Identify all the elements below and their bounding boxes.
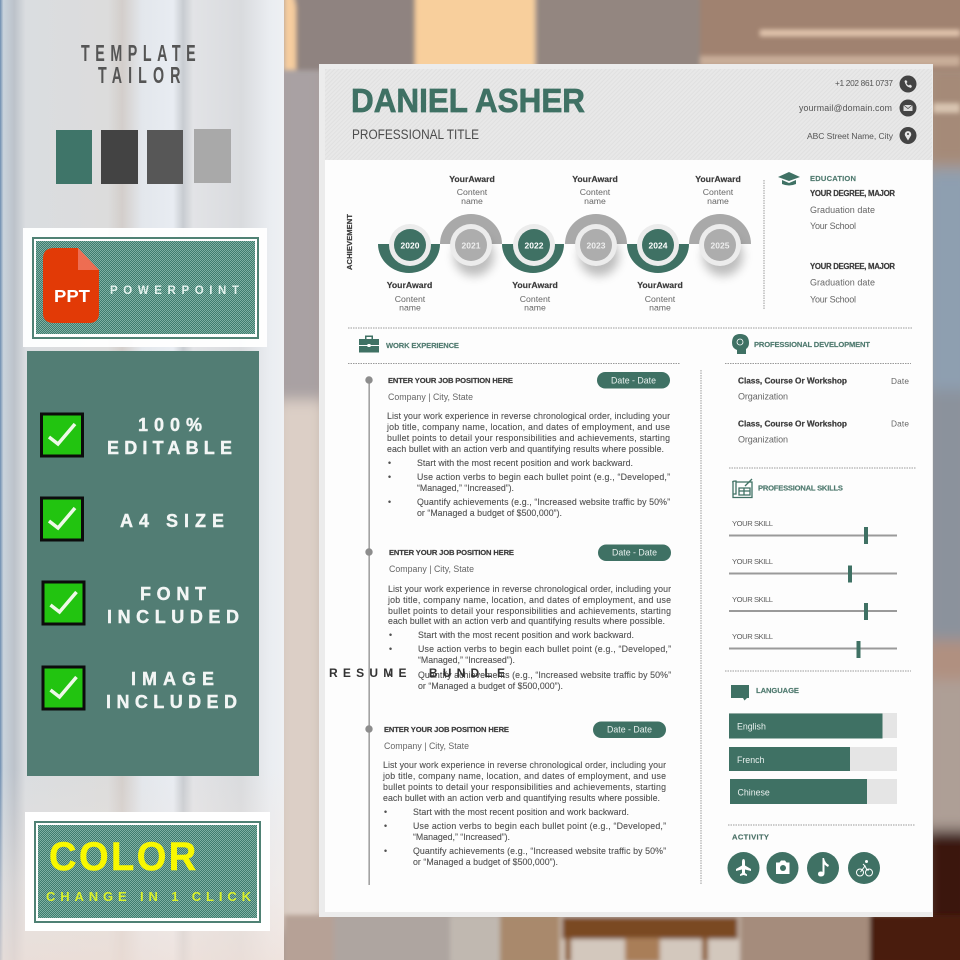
colour swatches [56, 129, 231, 184]
job entry 2: • [389, 670, 392, 680]
section: professional development [738, 376, 909, 444]
icon: music note [807, 852, 839, 884]
job entry 2: Use action verbs to begin each bullet point (e.g., “Developed,” [418, 644, 671, 654]
section: education: Your School [810, 294, 856, 304]
icon: check A4 size [42, 498, 82, 540]
timeline labels: name [584, 196, 606, 206]
timeline labels: YourAward [387, 280, 432, 290]
marker 2025: 2025 [711, 240, 730, 250]
text: A4 size: A4 SIZE [120, 511, 224, 531]
job entry 3: each bullet with an action verb and quantifying results where possible. [383, 793, 660, 803]
job entry 1: or “Managed a budget of $500,000”). [417, 508, 562, 518]
marker 2024 [637, 224, 679, 266]
name: DANIEL ASHER [351, 82, 585, 119]
icon: check 100% editable [42, 414, 82, 456]
section dividers [348, 180, 916, 885]
job entry 3: Company | City, State [384, 741, 469, 751]
subheading: change in 1 click: CHANGE IN 1 CLICK [46, 889, 252, 904]
marker 2022 [513, 224, 555, 266]
job entry 1: bullet points to detail your responsibilities and achievements, starting [387, 433, 670, 443]
timeline labels: YourAward [572, 174, 618, 184]
skill sliders: YOUR SKILL [732, 557, 773, 566]
job entry 1: job title, company name, location, and dates of employment, and use [386, 422, 670, 432]
icon: PPT file [43, 248, 99, 323]
timeline labels: Content [703, 187, 734, 197]
job entry 1: “Managed,” “Increased”). [417, 483, 514, 493]
date pill: Date - Date [611, 376, 656, 386]
timeline labels: YourAward [695, 174, 741, 184]
text: 100% editable: 100% [138, 415, 202, 435]
section: professional development: Organization [738, 392, 788, 402]
job entry 3: “Managed,” “Increased”). [413, 832, 510, 842]
marker 2020 [389, 224, 431, 266]
job entry 1: • [388, 472, 391, 482]
job entry 3: Start with the most recent position and work backward. [413, 807, 629, 817]
section: education: Graduation date [810, 205, 875, 215]
marker 2023 [575, 224, 617, 266]
text: 100% editable: EDITABLE [107, 438, 232, 458]
timeline labels: name [399, 302, 421, 312]
brand title: Template Tailor: TEMPLATE [81, 42, 196, 67]
icon: phone [900, 76, 916, 92]
panel: features [27, 351, 259, 776]
job entry 3: ENTER YOUR JOB POSITION HERE [384, 725, 509, 734]
date pill: Date - Date [607, 724, 652, 734]
timeline labels: Content [395, 294, 426, 304]
job entry 1: Company | City, State [388, 392, 473, 402]
timeline labels: Content [580, 187, 611, 197]
job entry 1: Quantify achievements (e.g., “Increased website traffic by 50%” [417, 497, 670, 507]
skill sliders [729, 519, 897, 658]
icon: cyclist [848, 852, 880, 884]
marker 2021: 2021 [462, 240, 481, 250]
header band [325, 69, 932, 160]
section: professional development: Date [891, 376, 909, 386]
job entry 2: each bullet with an action verb and quantifying results where possible. [388, 616, 665, 626]
heading: color: COLOR [49, 835, 196, 879]
heading: professional development: PROFESSIONAL DEVELOPMENT [754, 340, 870, 349]
icon: head with lightbulb [732, 334, 749, 354]
marker 2025 [699, 224, 741, 266]
job entry 2: “Managed,” “Increased”). [418, 655, 515, 665]
job entry 3 [382, 722, 666, 867]
timeline labels: YourAward [512, 280, 558, 290]
marker 2022: 2022 [525, 240, 544, 250]
timeline labels: YourAward [637, 280, 683, 290]
skill sliders: YOUR SKILL [732, 595, 773, 604]
activity icons [728, 852, 880, 884]
timeline labels: name [649, 302, 671, 312]
icon: graduation cap [778, 172, 800, 186]
badge: colour change [25, 812, 270, 931]
text: font included: INCLUDED [107, 607, 239, 627]
date pill: Date - Date [612, 548, 657, 558]
heading: activity: ACTIVITY [732, 832, 769, 842]
job entry 2: bullet points to detail your responsibilities and achievements, starting [388, 606, 671, 616]
job entry 2: List your work experience in reverse chronological order, including your [388, 584, 671, 594]
icon: briefcase [359, 336, 379, 352]
skill sliders: YOUR SKILL [732, 519, 773, 528]
job entry 3: or “Managed a budget of $500,000”). [413, 857, 558, 867]
text: font included: FONT [140, 584, 206, 604]
language bars: English [737, 722, 766, 732]
icon: speech bubble [731, 685, 749, 700]
job entry 1 [386, 372, 670, 518]
section: professional development: Class, Course Or Workshop [738, 418, 847, 428]
overlay caption: resume bundle: RESUME BUNDLE [329, 666, 505, 680]
section: education: EDUCATION [810, 174, 856, 183]
section: education: YOUR DEGREE, MAJOR [810, 189, 895, 198]
timeline labels: name [707, 196, 729, 206]
left column backdrop: curtain panel [0, 0, 284, 960]
job entry 1: Start with the most recent position and work backward. [417, 458, 633, 468]
vertical label: achievement: ACHIEVEMENT [345, 214, 354, 270]
text: font included [107, 584, 239, 627]
date pill [593, 722, 666, 738]
job entry 1: • [388, 497, 391, 507]
contact details [799, 76, 916, 144]
icon: location [900, 127, 916, 144]
timeline labels: name [461, 196, 483, 206]
marker 2023: 2023 [587, 240, 606, 250]
job entry 1: ENTER YOUR JOB POSITION HERE [388, 376, 513, 385]
section: education: YOUR DEGREE, MAJOR [810, 262, 895, 271]
timeline labels: Content [645, 294, 676, 304]
timeline labels: Content [457, 187, 488, 197]
timeline labels: Content [520, 294, 551, 304]
contact details: yourmail@domain.com [799, 103, 892, 113]
job entry 2: job title, company name, location, and dates of employment, and use [387, 595, 671, 605]
resume sheet [319, 64, 933, 917]
date pill [597, 372, 670, 388]
skill sliders: YOUR SKILL [732, 632, 773, 641]
job entry 3: • [384, 807, 387, 817]
contact details: ABC Street Name, City [807, 131, 894, 141]
job entry 3: • [384, 846, 387, 856]
text: 100% editable [107, 415, 232, 458]
job timeline line [365, 376, 373, 885]
icon: check image included [43, 667, 84, 709]
language bars [729, 713, 897, 804]
job entry 3: List your work experience in reverse chronological order, including your [383, 760, 666, 770]
label: PowerPoint: POWERPOINT [110, 285, 239, 297]
marker 2021 [450, 224, 492, 266]
job entry 2: Company | City, State [389, 564, 474, 574]
job entry 2 [387, 544, 671, 691]
job entry 2: ENTER YOUR JOB POSITION HERE [389, 548, 514, 557]
job entry 2: • [389, 630, 392, 640]
marker 2020: 2020 [401, 240, 420, 250]
brand title: Template Tailor: TAILOR [98, 64, 181, 89]
brand title: Template Tailor [81, 42, 196, 89]
background: blurred room photo [275, 0, 960, 960]
marker 2024: 2024 [649, 240, 668, 250]
section: education: Your School [810, 221, 856, 231]
contact details: +1 202 861 0737 [835, 78, 893, 88]
job entry 3: Quantify achievements (e.g., “Increased website traffic by 50%” [413, 846, 666, 856]
job entry 1: • [388, 458, 391, 468]
job entry 2: Quantify achievements (e.g., “Increased website traffic by 50%” [418, 670, 671, 680]
heading: work experience: WORK EXPERIENCE [386, 341, 459, 350]
section: education: Graduation date [810, 278, 875, 288]
job entry 2: Start with the most recent position and work backward. [418, 630, 634, 640]
language bars: French [737, 755, 764, 765]
section: professional development: Organization [738, 434, 788, 444]
icon: mail [900, 100, 916, 116]
job entry 3: • [384, 821, 387, 831]
icon: skills chart [733, 479, 752, 498]
text: image included: IMAGE [131, 669, 214, 689]
job entry 1: Use action verbs to begin each bullet point (e.g., “Developed,” [417, 472, 670, 482]
arcs [378, 214, 751, 273]
icon: PPT file: PPT [54, 286, 90, 306]
timeline labels: YourAward [449, 174, 495, 184]
timeline labels [387, 174, 741, 312]
badge: PowerPoint [23, 228, 267, 347]
job entry 2: • [389, 644, 392, 654]
heading: professional skills: PROFESSIONAL SKILLS [758, 484, 843, 492]
section: professional development: Date [891, 418, 909, 428]
section: education [810, 174, 895, 304]
language bars: Chinese [738, 788, 770, 798]
job entry 2: or “Managed a budget of $500,000”). [418, 681, 563, 691]
section: professional development: Class, Course Or Workshop [738, 376, 847, 386]
professional title: PROFESSIONAL TITLE [352, 127, 479, 142]
text: image included: INCLUDED [106, 692, 237, 712]
achievement timeline [378, 214, 751, 276]
icon: check font included [43, 582, 84, 624]
job entry 3: job title, company name, location, and dates of employment, and use [382, 771, 666, 781]
text: image included [106, 669, 237, 712]
job entry 3: Use action verbs to begin each bullet point (e.g., “Developed,” [413, 821, 666, 831]
date pill [598, 544, 671, 561]
job entry 1: List your work experience in reverse chronological order, including your [387, 411, 670, 421]
timeline labels: name [524, 302, 546, 312]
icon: camera [766, 852, 798, 884]
icon: plane [728, 852, 760, 884]
job entry 3: bullet points to detail your responsibilities and achievements, starting [383, 782, 666, 792]
soft shadows [454, 236, 743, 276]
job entry 1: each bullet with an action verb and quantifying results where possible. [387, 444, 664, 454]
heading: language: LANGUAGE [756, 686, 799, 695]
